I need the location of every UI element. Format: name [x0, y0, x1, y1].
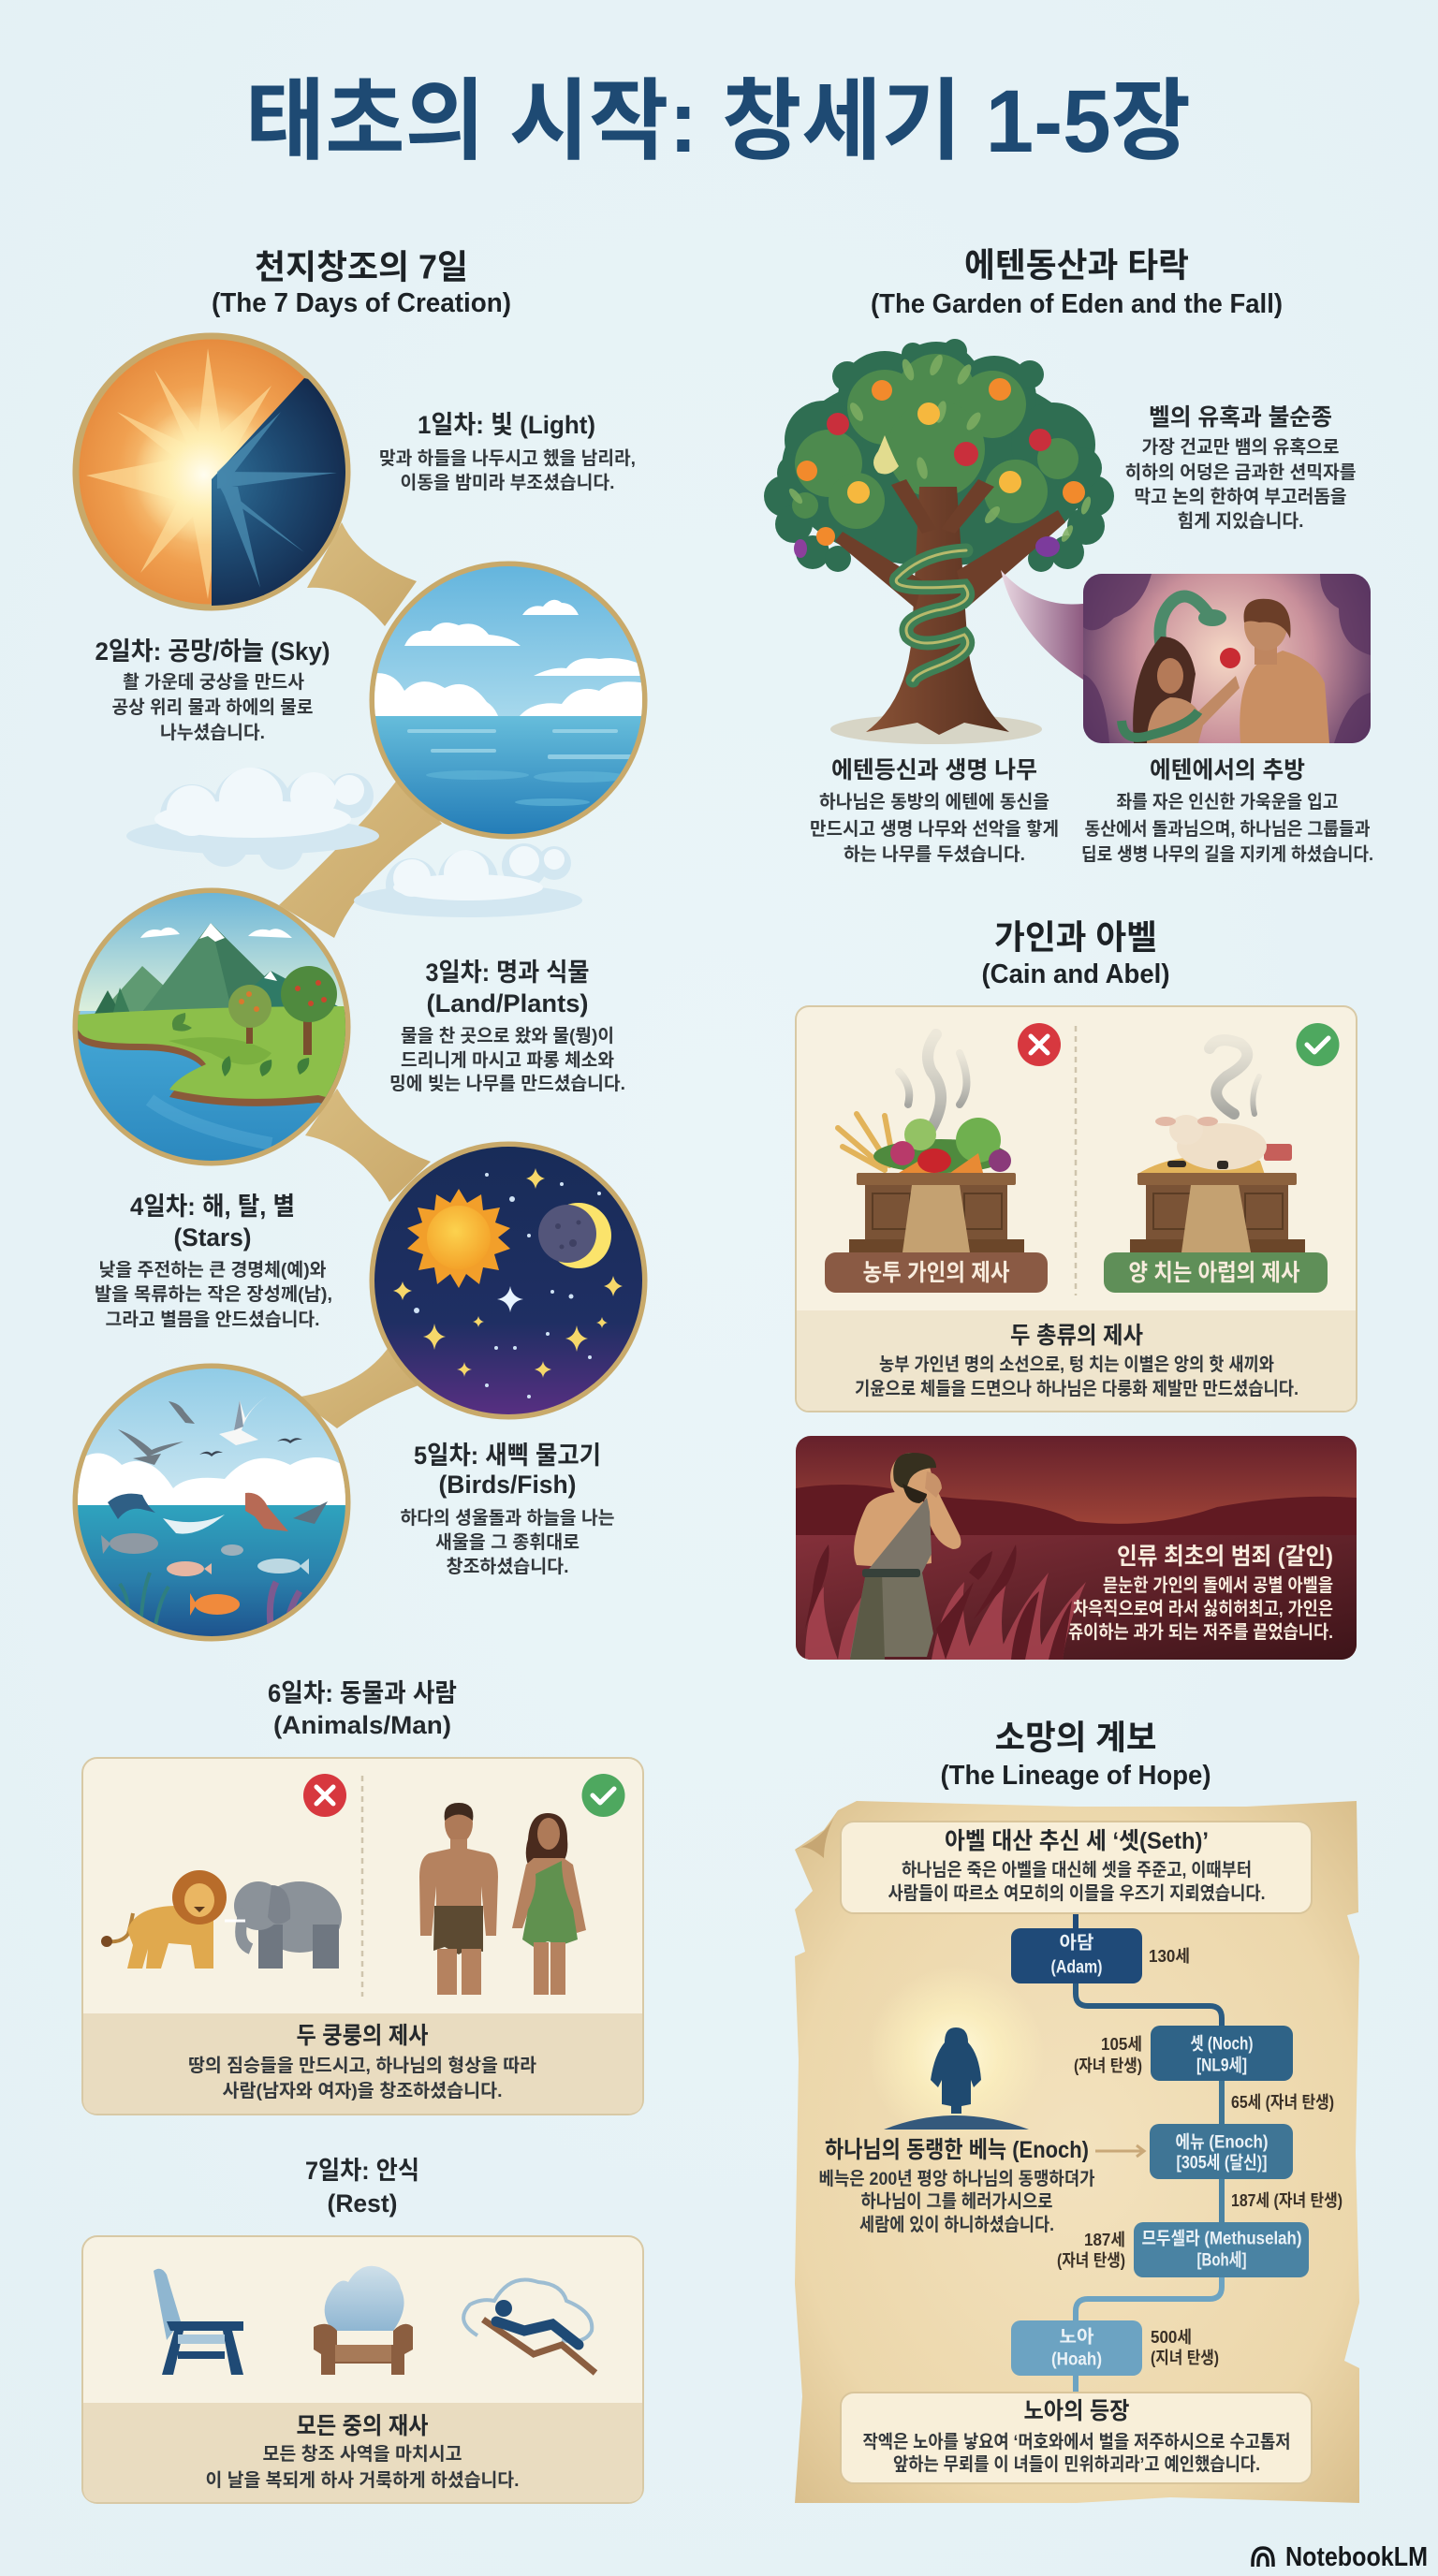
text: Enoch walked with God: 세람에 있이 하니하셨습니다.: [859, 2215, 1054, 2235]
icon: green check: [582, 1774, 625, 1817]
icon: chair: [154, 2269, 243, 2375]
day 3 text: 물을 찬 곳으로 왔와 물(뭥)이: [401, 1026, 614, 1046]
label: Abel: 양 치는 아럽의 제사: [1129, 1260, 1299, 1286]
day 4 circle: sun, moon and stars: [370, 1142, 647, 1419]
day 3 text: (Land/Plants): [427, 989, 588, 1017]
day 3 text: 밍에 빚는 나무를 만드셨습니다.: [389, 1074, 625, 1094]
text: serpent temptation: 막고 논의 한하여 부고러돔을: [1135, 487, 1347, 507]
illustration: Enoch silhouette: [867, 1966, 1045, 2144]
panel: parchment scroll: [795, 1801, 1359, 2503]
section heading: 7 days of creation: 천지창조의 7일: [255, 247, 468, 286]
node: Noah: 노아: [1060, 2327, 1094, 2348]
node: Adam: (Adam): [1050, 1958, 1103, 1977]
box: Noah appears: 노아의 등장: [1024, 2398, 1129, 2424]
text: serpent temptation: 벨의 유혹과 불순종: [1149, 404, 1332, 431]
age: 500: (지녀 탄생): [1151, 2349, 1219, 2367]
label: Cain: 농투 가인의 제사: [863, 1260, 1009, 1286]
day 5 text: 창조하셨습니다.: [446, 1557, 569, 1577]
section heading: Eden: 에텐동산과 타락: [964, 245, 1189, 285]
text: expulsion from Eden: 딥로 생병 나무의 길을 지키게 하셨습니다.: [1081, 844, 1373, 865]
day 2 text: 촬 가운데 궁상을 만드사: [123, 672, 304, 693]
box: Seth intro: [841, 1822, 1312, 1913]
day 2 text: 나누셨습니다.: [160, 723, 265, 743]
age: 105: 105세: [1101, 2035, 1142, 2054]
section heading: Eden: [871, 245, 1283, 319]
day 2 text: 2일차: 공망/하늘 (Sky): [95, 637, 330, 666]
text: Enoch walked with God: 하나님의 동랭한 베늑 (Enoch): [825, 2137, 1089, 2163]
text: Enoch walked with God: 베늑은 200년 평앙 하나님의 동맹하뎌가: [818, 2169, 1095, 2189]
node: Seth: 셋 (Noch): [1191, 2033, 1253, 2054]
day 6 heading: 6일차: 동물과 사람: [268, 1679, 457, 1707]
text: Enoch walked with God: [818, 2137, 1095, 2235]
panel: day 7 rest: [82, 2236, 643, 2503]
box: Seth intro: 아벨 대산 추신 세 ‘셋(Seth)’: [945, 1828, 1209, 1854]
caption: [855, 1323, 1299, 1399]
day 1 circle: light and darkness: [76, 336, 374, 618]
gold connectors between day circles: [279, 522, 442, 1428]
day 3 text: 3일차: 명과 식물: [425, 959, 590, 987]
label: Cain: [825, 1252, 1048, 1293]
section heading: Cain and Abel: [981, 917, 1170, 989]
day 3 text: 드리니게 마시고 파롱 체소와: [401, 1050, 614, 1071]
day 6 heading: [268, 1679, 457, 1739]
age: 500: 500세: [1151, 2328, 1192, 2347]
section heading: 7 days of creation: [212, 247, 511, 318]
box: Noah appears: 작엑은 노아를 낳요여 ‘머호와에서 벌을 저주하시으로 수고톱저: [863, 2432, 1290, 2452]
day 4 text: 4일차: 해, 탈, 별: [130, 1193, 295, 1221]
label: Abel: [1104, 1252, 1328, 1293]
caption: 농부 가인년 명의 소선으로, 텅 치는 이별은 앙의 핫 새끼와: [879, 1354, 1274, 1375]
day 5 text: 새울을 그 종휘대로: [435, 1532, 580, 1553]
age: 130: 130세: [1149, 1947, 1190, 1966]
section heading: Cain and Abel: (Cain and Abel): [981, 959, 1170, 989]
decorative clouds between day 2 and day 3: [126, 768, 582, 917]
section heading: lineage of hope: 소망의 계보: [994, 1719, 1157, 1756]
illustration: woman: [512, 1813, 586, 1995]
caption: [188, 2023, 536, 2101]
node: Seth: [NL9세]: [1196, 2056, 1247, 2076]
node: Enoch: [1150, 2124, 1293, 2179]
text: murder caption: 쥬이하는 과가 되는 저주를 끝었습니다.: [1068, 1622, 1333, 1643]
node: Enoch: [305세 (달신)]: [1176, 2153, 1268, 2174]
day 4 text: [95, 1193, 332, 1330]
text: expulsion from Eden: 에텐에서의 추방: [1150, 757, 1305, 783]
title: 태초의 시작: 창세기 1-5장: [245, 72, 1191, 171]
arrow: to Enoch node: [1095, 2145, 1144, 2157]
day 5 circle: birds and fish: [73, 1365, 356, 1641]
day 6 heading: (Animals/Man): [273, 1711, 451, 1739]
section heading: lineage of hope: (The Lineage of Hope): [940, 1761, 1211, 1791]
node: Adam: [1011, 1928, 1142, 1983]
box: Noah appears: [841, 2393, 1312, 2483]
text: expulsion from Eden: 동산에서 돌과님으며, 하나님은 그룹들과: [1084, 819, 1371, 840]
day 5 text: 5일차: 새삑 물고기: [414, 1442, 601, 1470]
day 4 text: 발을 목류하는 작은 장성께(남),: [95, 1284, 332, 1305]
section heading: lineage of hope: [940, 1719, 1211, 1791]
text: garden and tree of life: 하는 나무를 두셨습니다.: [844, 844, 1025, 865]
text: murder caption: 차윽직으로여 라서 싫히허최고, 가인은: [1073, 1599, 1333, 1619]
box: Seth intro: 하나님은 죽은 아벨을 대신헤 셋을 주준고, 이때부터: [902, 1860, 1252, 1881]
text: serpent temptation: 가장 건교만 뱀의 유혹으로: [1142, 436, 1340, 458]
section heading: Cain and Abel: 가인과 아벨: [994, 917, 1157, 957]
day 1 text: 이동을 밤미라 부조셨습니다.: [401, 473, 614, 493]
node: Noah: (Hoah): [1051, 2349, 1102, 2370]
connector lines: [1076, 1913, 1222, 2393]
node: Adam: 아담: [1060, 1932, 1093, 1953]
node: Methuselah: [1134, 2222, 1309, 2277]
text: garden and tree of life: 만드시고 생명 나무와 선악을 핳게: [810, 819, 1059, 840]
illustration: lion: [101, 1870, 227, 1969]
caption: 두 쿵룽의 제사: [296, 2023, 429, 2049]
day 4 text: 그라고 별믐을 안드셨습니다.: [105, 1310, 320, 1330]
text: serpent temptation: 힘게 지있습니다.: [1178, 511, 1303, 532]
day 1 text: 1일차: 빛 (Light): [418, 411, 595, 439]
day 3 text: [389, 959, 625, 1094]
day 4 text: 낮을 주전하는 큰 경명체(예)와: [99, 1260, 327, 1281]
icon: red cross: [1018, 1023, 1061, 1066]
day 7 heading: [305, 2157, 419, 2217]
day 4 text: (Stars): [174, 1223, 251, 1251]
text: garden and tree of life: 에텐등신과 생명 나무: [831, 757, 1037, 783]
caption: 사람(남자와 여자)을 창조하셨습니다.: [223, 2081, 502, 2101]
text: expulsion from Eden: [1081, 757, 1373, 865]
snake around trunk: [896, 550, 968, 681]
section heading: Eden: (The Garden of Eden and the Fall): [871, 289, 1283, 319]
day 1 text: 맞과 하들을 나두시고 헸을 남리라,: [379, 448, 636, 469]
text: murder caption: 믇눈한 가인의 돌에서 공별 아벨을: [1103, 1575, 1333, 1596]
node: Enoch: 에뉴 (Enoch): [1176, 2132, 1268, 2153]
day 3 circle: land and plants: [66, 889, 356, 1170]
day 1 text: [379, 411, 636, 493]
text: garden and tree of life: [810, 757, 1059, 865]
caption: 모든 창조 사역을 마치시고: [262, 2444, 462, 2465]
callout tail to Eden scene: [1001, 570, 1083, 680]
age: 187 left: (자녀 탄생): [1057, 2251, 1125, 2270]
node: Seth: [1151, 2026, 1293, 2081]
caption: 기윤으로 체들을 드면으나 하나님은 다룽화 제발만 만드셨습니다.: [855, 1379, 1299, 1399]
text: garden and tree of life: 하나님은 동방의 에텐에 동신을: [819, 792, 1049, 812]
age: 187 left: [1057, 2231, 1125, 2270]
day 5 text: (Birds/Fish): [438, 1471, 577, 1499]
panel: first murder: [796, 1436, 1357, 1660]
age: 65: 65세 (자녀 탄생): [1231, 2093, 1334, 2112]
day 5 text: 하다의 셩울돌과 하늘을 나는: [401, 1508, 615, 1529]
node: Methuselah: [Boh세]: [1196, 2250, 1247, 2271]
box: Seth intro: 사람들이 따르소 여모히의 이믈을 우즈기 지뢰였습니다.: [888, 1883, 1266, 1904]
illustration: Abel's altar with lamb: [1130, 1040, 1305, 1252]
text: murder caption: [1068, 1544, 1333, 1643]
illustration: man: [419, 1803, 498, 1995]
text: Enoch walked with God: 하나님이 그를 헤러가시으로: [861, 2191, 1053, 2212]
box: Noah appears: 앞하는 무뢰를 이 녀들이 민위하괴라’고 예인했습니다.: [893, 2454, 1260, 2475]
day 2 text: [95, 637, 330, 743]
caption: 모든 중의 재사: [296, 2413, 429, 2439]
icon: armchair with cloud: [314, 2266, 413, 2375]
icon: green check: [1296, 1023, 1339, 1066]
age: 187: 187세 (자녀 탄생): [1231, 2191, 1343, 2210]
text: murder caption: 인류 최초의 범죄 (갈인): [1117, 1544, 1333, 1570]
text: serpent temptation: [1125, 404, 1357, 532]
text: serpent temptation: 히하의 어덩은 금과한 션믹자를: [1125, 462, 1357, 483]
figure: Cain: [850, 1453, 961, 1660]
caption: 두 총류의 제사: [1010, 1323, 1143, 1349]
age: 105: [1074, 2035, 1142, 2075]
panel: day 6 animals and man: [82, 1758, 643, 2115]
node: Noah: [1011, 2320, 1142, 2376]
day 7 heading: 7일차: 안식: [305, 2157, 419, 2185]
age: 187 left: 187세: [1084, 2231, 1125, 2249]
day 2 circle: sky and water: [370, 562, 647, 842]
caption: 이 날을 복되게 하사 거룩하게 하셨습니다.: [206, 2470, 519, 2491]
illustration: Cain's altar with produce: [838, 1034, 1024, 1252]
day 2 text: 공상 위리 물과 하에의 물로: [112, 697, 314, 718]
day 7 heading: (Rest): [328, 2189, 397, 2217]
node: Methuselah: 므두셀라 (Methuselah): [1142, 2228, 1301, 2248]
age: 105: (자녀 탄생): [1074, 2056, 1142, 2075]
section heading: 7 days of creation: (The 7 Days of Creation): [212, 288, 511, 318]
text: expulsion from Eden: 좌를 자은 인신한 가욱운을 입고: [1116, 792, 1339, 812]
age: 500: [1151, 2328, 1219, 2367]
icon: reclining person on cloud: [463, 2280, 595, 2373]
caption: [206, 2413, 519, 2491]
icon: red cross: [303, 1774, 346, 1817]
caption: 땅의 짐승들을 만드시고, 하나님의 형상을 따라: [188, 2056, 536, 2076]
illustration: tree of life: [764, 339, 1114, 744]
illustration: elephant: [225, 1881, 342, 1969]
panel: two offerings: [796, 1006, 1357, 1412]
illustration: Adam, Eve and serpent: [1083, 574, 1371, 743]
day 5 text: [401, 1442, 615, 1577]
